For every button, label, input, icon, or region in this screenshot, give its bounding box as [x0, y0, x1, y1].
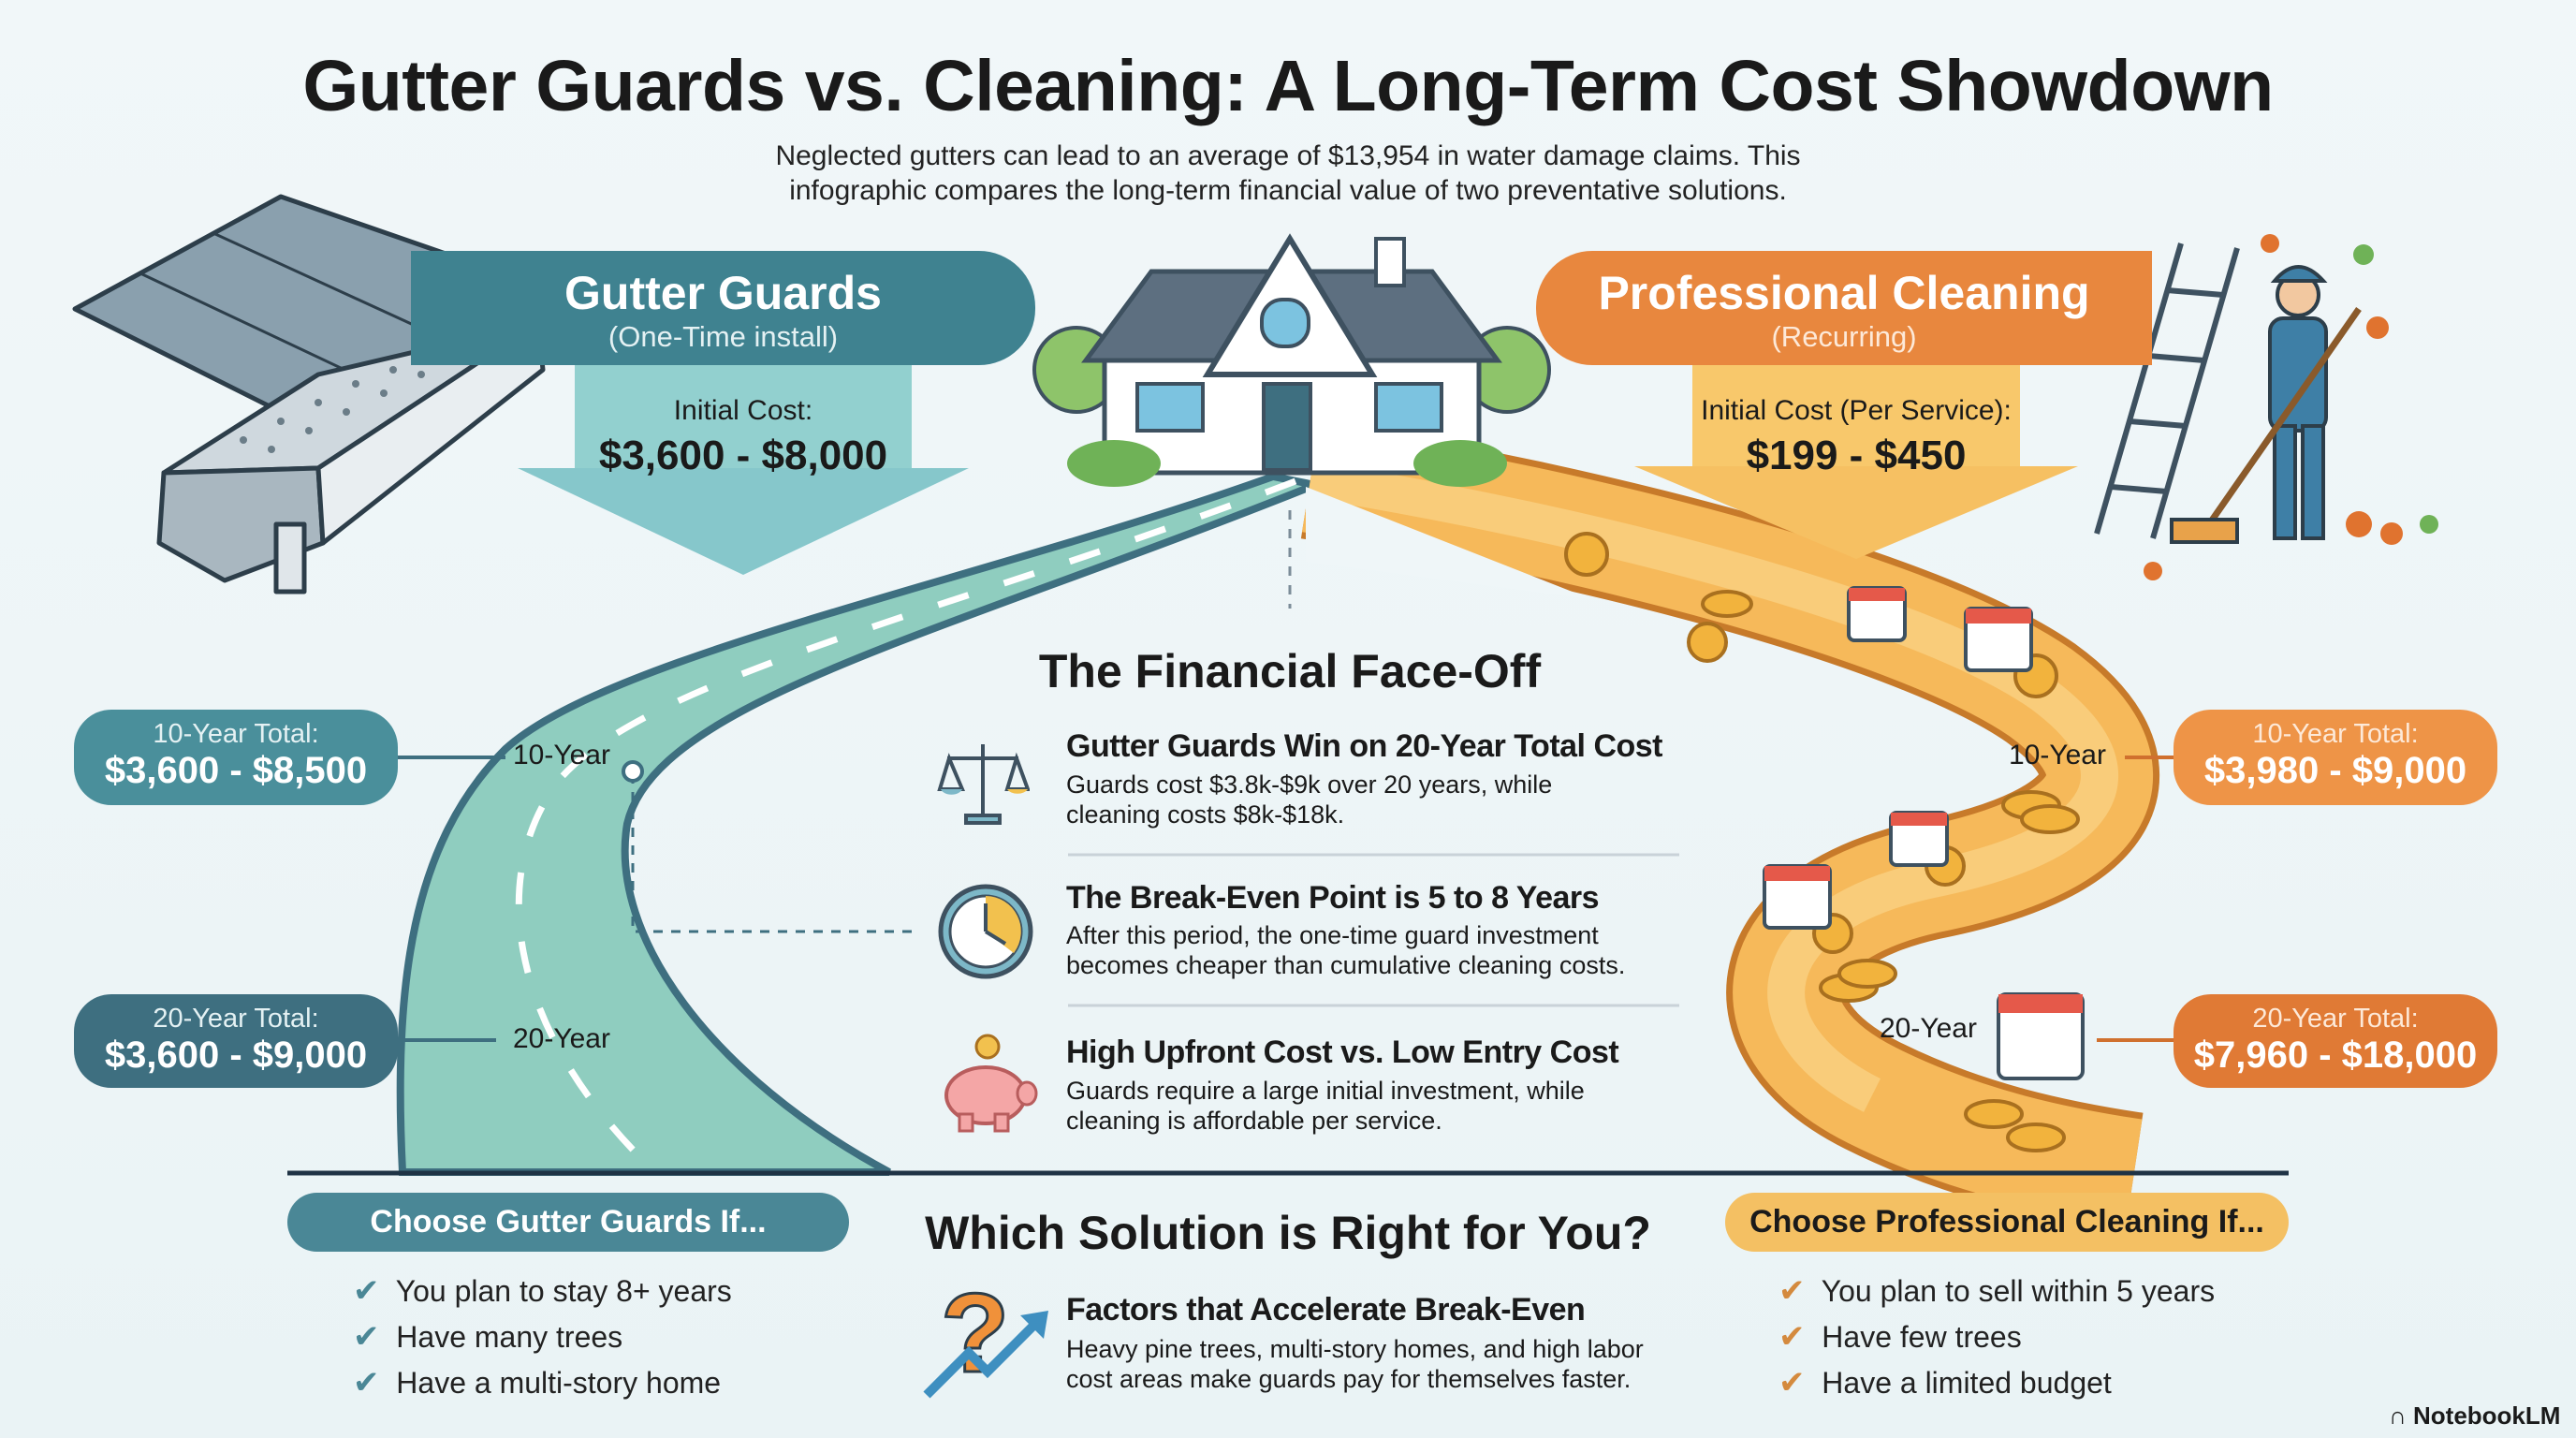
connector lines: [398, 757, 505, 1040]
pill: cleaning 20-year total: 20-Year Total:: [2252, 1004, 2419, 1034]
pill: guards 10-year total: 10-Year Total:: [153, 719, 319, 749]
text: 10-Year: [2009, 740, 2106, 770]
item: upfront cost: cleaning is affordable per service.: [1066, 1107, 1442, 1135]
icon: question mark with arrow: ?: [941, 1270, 1009, 1396]
pill: choose gutter guards: Choose Gutter Guards If...: [370, 1204, 767, 1240]
title: Gutter Guards vs. Cleaning: A Long-Term Cost Showdown: [302, 46, 2274, 126]
checklist: cleaning: ✔ You plan to sell within 5 years: [1778, 1273, 2215, 1309]
checklist: gutter guards: ✔ You plan to stay 8+ years: [353, 1273, 732, 1309]
icon: question mark with arrow: [923, 1270, 1048, 1399]
pill: cleaning 10-year total: 10-Year Total:: [2252, 719, 2419, 749]
pill: guards 10-year total: $3,600 - $8,500: [105, 750, 367, 791]
item: break-even point: [938, 880, 1625, 979]
pill: choose professional cleaning: [1725, 1193, 2289, 1252]
banner: professional cleaning: (Recurring): [1771, 320, 1917, 353]
banner: gutter guards: (One-Time install): [608, 320, 838, 353]
text: 20-Year: [1880, 1013, 1977, 1044]
text: factors: [1066, 1292, 1644, 1393]
item: upfront cost: [944, 1034, 1619, 1135]
pill: guards 10-year total: [74, 710, 398, 805]
icon: piggy bank: [944, 1034, 1037, 1133]
subtitle: infographic compares the long-term financial value of two preventative solutions.: [789, 175, 1787, 206]
item: 20-year total cost: Gutter Guards Win on 20-Year Total Cost: [1066, 728, 1662, 764]
arrow: gutter guards initial cost: $3,600 - $8,000: [599, 433, 887, 478]
arrow: gutter guards initial cost: [518, 365, 969, 575]
pill: cleaning 10-year total: [2174, 710, 2497, 805]
banner: gutter guards: Gutter Guards: [564, 267, 882, 319]
item: 20-year total cost: cleaning costs $8k-$18k.: [1066, 800, 1344, 829]
orange road: [1306, 479, 2134, 1172]
coins and calendars: [1566, 534, 2078, 1151]
item: break-even point: becomes cheaper than cumulative cleaning costs.: [1066, 951, 1625, 979]
item: break-even point: After this period, the one-time guard investment: [1066, 921, 1599, 949]
text: factors: cost areas make guards pay for themselves faster.: [1066, 1365, 1631, 1393]
green road: [401, 477, 1315, 1172]
logo: NotebookLM: ∩ NotebookLM: [2389, 1401, 2560, 1430]
pill: guards 20-year total: $3,600 - $9,000: [105, 1034, 367, 1076]
banner: professional cleaning: Professional Cleaning: [1598, 267, 2090, 319]
icon: balance scale: [937, 744, 1030, 825]
checklist: cleaning: ✔ Have few trees: [1778, 1319, 2022, 1355]
item: upfront cost: Guards require a large initial investment, while: [1066, 1077, 1585, 1105]
heading: which solution: Which Solution is Right for You?: [925, 1207, 1651, 1259]
arrow: gutter guards initial cost: Initial Cost:: [674, 395, 812, 426]
item: break-even point: The Break-Even Point is 5 to 8 Years: [1066, 880, 1599, 916]
subtitle: Neglected gutters can lead to an average of $13,954 in water damage claims. This: [775, 140, 1801, 171]
icon: clock: [938, 884, 1033, 979]
pill: choose professional cleaning: Choose Professional Cleaning If...: [1749, 1204, 2264, 1240]
text: factors: Heavy pine trees, multi-story homes, and high labor: [1066, 1335, 1644, 1363]
subtitle: [775, 140, 1801, 206]
checklist: cleaning: [1778, 1273, 2215, 1401]
ladder and worker: [2097, 243, 2237, 538]
pill: cleaning 20-year total: [2174, 994, 2497, 1088]
checklist: cleaning: ✔ Have a limited budget: [1778, 1365, 2112, 1401]
divider lines: [1068, 854, 1679, 856]
checklist: gutter guards: [353, 1273, 732, 1401]
arrow: cleaning initial cost: [1634, 365, 2078, 556]
pill: choose gutter guards: [287, 1193, 849, 1252]
checklist: gutter guards: ✔ Have many trees: [353, 1319, 622, 1355]
pill: cleaning 10-year total: $3,980 - $9,000: [2204, 750, 2466, 791]
item: upfront cost: High Upfront Cost vs. Low Entry Cost: [1066, 1034, 1618, 1070]
item: 20-year total cost: [937, 728, 1662, 829]
banner: gutter guards: [411, 251, 1035, 365]
checklist: gutter guards: ✔ Have a multi-story home: [353, 1365, 721, 1401]
house: [1034, 239, 1549, 487]
road labels: 10-Year: [513, 740, 610, 770]
arrow: cleaning initial cost: Initial Cost (Per Service):: [1701, 395, 2012, 426]
gutter guard illustration: [75, 197, 543, 592]
pill: guards 20-year total: 20-Year Total:: [153, 1004, 319, 1034]
heading: financial face-off: The Financial Face-Off: [1039, 645, 1541, 697]
pill: guards 20-year total: [74, 994, 398, 1088]
item: 20-year total cost: Guards cost $3.8k-$9k over 20 years, while: [1066, 770, 1552, 799]
arrow: cleaning initial cost: $199 - $450: [1747, 433, 1966, 478]
text: factors: Factors that Accelerate Break-Even: [1066, 1292, 1585, 1328]
text: 20-Year: [513, 1023, 610, 1054]
pill: cleaning 20-year total: $7,960 - $18,000: [2194, 1034, 2477, 1076]
banner: professional cleaning: [1536, 251, 2152, 365]
